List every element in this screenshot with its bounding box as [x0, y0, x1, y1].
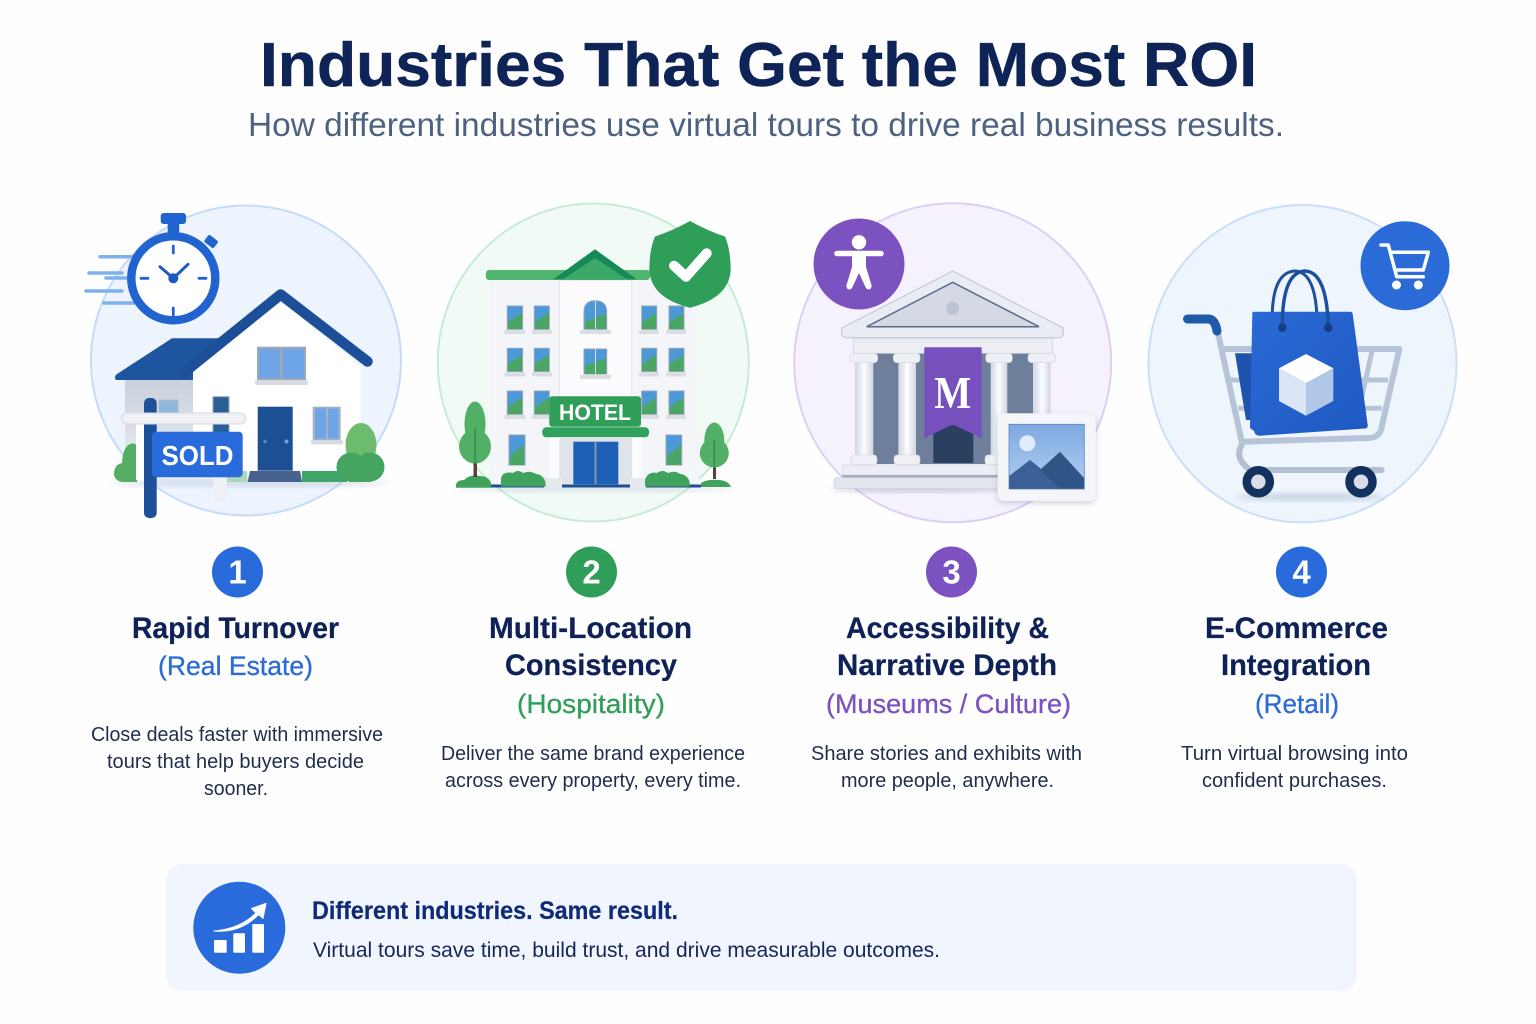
number badge 2: 2 — [582, 554, 601, 590]
icon: house with sold sign — [110, 294, 390, 518]
icon: museum building — [830, 271, 1063, 492]
text block: retail: Turn virtual browsing into — [1181, 742, 1408, 765]
icon: shield with check — [649, 221, 731, 308]
text block: real estate: tours that help buyers decide — [107, 750, 364, 773]
text block: hospitality: Consistency — [505, 649, 677, 682]
icon: stopwatch — [86, 213, 219, 320]
icon: picture frame — [998, 413, 1096, 501]
icon: hotel building: HOTEL — [559, 400, 631, 425]
illustration circle: hospitality — [438, 204, 749, 522]
icon: shopping cart with bag — [1188, 271, 1399, 501]
text block: retail: E-Commerce — [1205, 612, 1388, 645]
illustration circle: museums — [794, 203, 1111, 522]
text block: hospitality: across every property, every time. — [445, 769, 741, 792]
number badge 2 — [566, 546, 617, 598]
text block: real estate: (Real Estate) — [158, 651, 313, 681]
number badge 3: 3 — [942, 554, 961, 590]
text block: real estate — [91, 612, 383, 800]
text block: hospitality — [441, 612, 745, 792]
illustration circle: retail — [1148, 205, 1456, 522]
text block: retail: (Retail) — [1255, 689, 1339, 719]
panel: retail — [1148, 205, 1456, 522]
text block: hospitality: (Hospitality) — [517, 689, 665, 719]
text block: real estate: sooner. — [204, 777, 268, 800]
text block: museums — [811, 612, 1082, 792]
icon: cart badge — [1360, 221, 1450, 310]
text block: museums: Narrative Depth — [837, 649, 1057, 682]
text block: hospitality: Multi-Location — [489, 612, 692, 645]
icon: museum building: M — [934, 367, 971, 418]
number badge 1 — [212, 546, 263, 598]
panel: museums — [794, 203, 1111, 522]
number badge 4: 4 — [1292, 554, 1311, 590]
text block: retail: confident purchases. — [1202, 769, 1387, 792]
text block: real estate: Rapid Turnover — [132, 612, 339, 645]
number badge 4 — [1276, 546, 1327, 598]
number badge 3 — [926, 546, 977, 598]
text block: retail — [1181, 612, 1408, 792]
text block: retail: Integration — [1221, 649, 1371, 682]
banner heading: Different industries. Same result. — [312, 897, 678, 925]
text block: museums: Accessibility & — [846, 612, 1049, 645]
number badge 1: 1 — [228, 554, 247, 590]
text block: hospitality: Deliver the same brand experience — [441, 742, 745, 765]
banner text: Virtual tours save time, build trust, and drive measurable outcomes. — [313, 938, 940, 962]
text block: museums: more people, anywhere. — [841, 769, 1054, 792]
icon: hotel building — [455, 249, 735, 492]
icon: growth chart — [193, 882, 285, 974]
text block: museums: Share stories and exhibits with — [811, 742, 1082, 765]
panel: real estate — [86, 206, 401, 518]
icon: house with sold sign: SOLD — [162, 440, 234, 471]
illustration circle: real estate — [91, 206, 401, 516]
text block: real estate: Close deals faster with immersive — [91, 723, 383, 746]
text block: museums: (Museums / Culture) — [826, 689, 1071, 719]
subtitle: How different industries use virtual tours to drive real business results. — [248, 106, 1284, 143]
icon: accessibility badge — [814, 218, 904, 310]
panel: hospitality — [438, 204, 749, 522]
title: Industries That Get the Most ROI — [260, 31, 1257, 100]
callout: summary banner — [166, 864, 1357, 991]
